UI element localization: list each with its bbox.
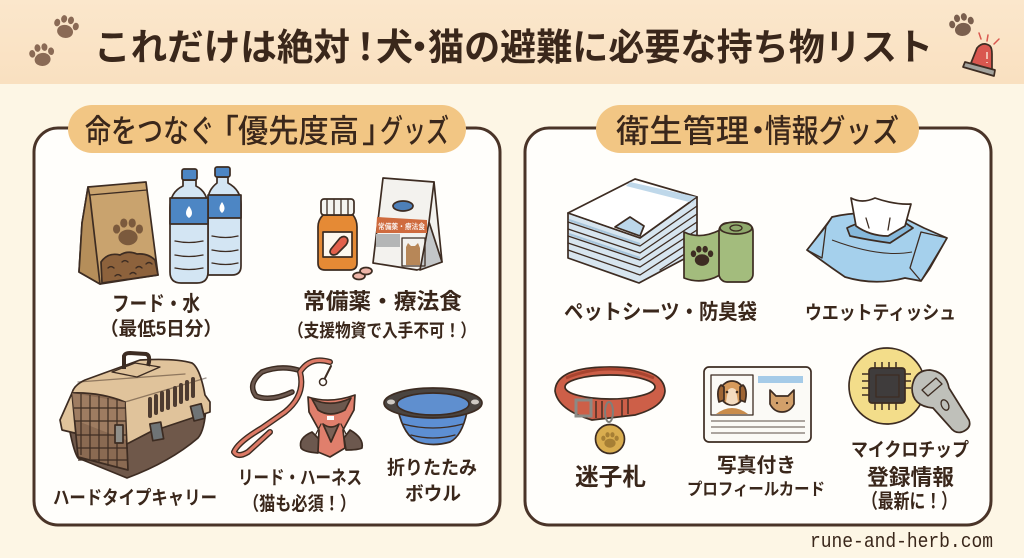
label: leash and harness: （猫も必須！） [243, 493, 356, 515]
heading: right: 情報グッズ [765, 113, 899, 149]
icon: warning siren [963, 33, 999, 76]
icon: water bottles [170, 167, 241, 283]
heading pill: left [68, 105, 466, 153]
heading: right: ・ [742, 113, 774, 149]
heading: right: 衛生管理 [616, 113, 749, 149]
icon: profile card [704, 367, 811, 442]
icon: pet sheets [568, 179, 697, 283]
title: ・ [401, 27, 438, 68]
icon: therapeutic diet bag: 常備薬・療法食 [378, 221, 425, 231]
header band [0, 0, 1024, 84]
label: folding bowl: ボウル [405, 483, 461, 505]
label: medicine and diet: 常備薬・療法食 [303, 289, 462, 314]
label: profile card [687, 454, 825, 499]
heading: left: 」 [362, 113, 394, 149]
heading pill: right [596, 105, 919, 153]
icon: therapeutic diet bag [373, 178, 442, 270]
title: 犬 [376, 27, 413, 68]
label: pet sheets: ペットシーツ・防臭袋 [564, 301, 757, 324]
heading: left: 「 [207, 113, 239, 149]
heading: right [616, 113, 899, 149]
label: leash and harness [238, 467, 362, 515]
icon: deodorant bags roll [684, 222, 753, 282]
label: microchip info: （最新に！） [862, 490, 957, 513]
label: wet wipes: ウエットティッシュ [805, 302, 956, 324]
title [94, 27, 933, 68]
label: profile card: 写真付き [717, 454, 796, 477]
panel: priority goods [34, 105, 500, 525]
label: folding bowl: 折りたたみ [387, 457, 477, 479]
icon: food bag [79, 182, 158, 284]
icon: pet carrier [60, 353, 210, 478]
icon: harness [300, 395, 362, 457]
heading: left: 命をつなぐ [85, 113, 215, 149]
label: hard carrier: ハードタイプキャリー [53, 487, 217, 509]
icon: leash [234, 360, 331, 455]
title: これだけは絶対 [94, 27, 350, 68]
icon: microchip and scanner [849, 348, 970, 432]
title: 猫の避難に必要な持ち物リスト [428, 27, 933, 68]
label: food and water [100, 293, 222, 340]
icon: wet wipes [807, 198, 947, 282]
label: profile card: プロフィールカード [687, 480, 825, 499]
label: leash and harness: リード・ハーネス [238, 467, 362, 489]
label: microchip info [851, 439, 969, 513]
heading: left [85, 113, 449, 149]
icon: paw prints left [28, 13, 81, 68]
icon: collar with tag [555, 367, 665, 454]
icon: medicine bottle and pills [318, 199, 372, 280]
label: microchip info: マイクロチップ [851, 439, 969, 461]
title: ！ [347, 27, 384, 68]
panel frame: left [34, 128, 500, 525]
label: food and water: フード・水 [112, 293, 200, 316]
heading: left: グッズ [380, 113, 449, 149]
panel frame: right [525, 128, 991, 525]
label: medicine and diet: （支援物資で入手不可！） [288, 321, 476, 341]
label: lost tag: 迷子札 [575, 464, 646, 491]
heading: left: 優先度高 [238, 113, 359, 149]
label: medicine and diet [288, 289, 476, 341]
label: food and water: （最低5日分） [100, 318, 222, 340]
site credit: rune-and-herb.com [810, 531, 993, 554]
panel: hygiene and info goods [525, 105, 991, 525]
label: folding bowl [387, 457, 477, 505]
label: microchip info: 登録情報 [867, 465, 954, 490]
icon: paw print right [947, 11, 977, 38]
icon: folding bowl [384, 388, 482, 444]
